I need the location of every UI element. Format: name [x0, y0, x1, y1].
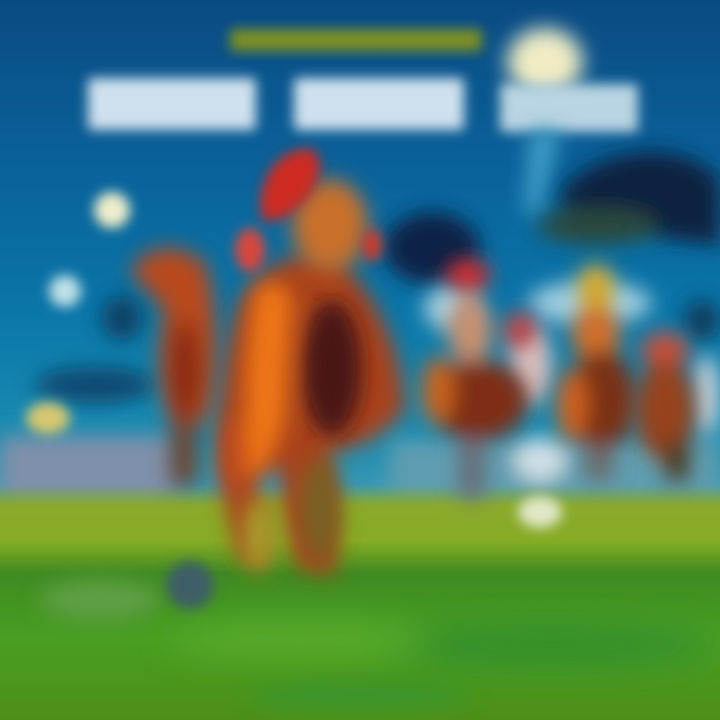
- grass track: [0, 484, 720, 720]
- jockey red cap and silks: [235, 148, 382, 272]
- light beam: [524, 130, 560, 215]
- pale crowd patches: [424, 281, 720, 435]
- grandstand: [0, 436, 720, 502]
- horse: centre with jockey: [218, 148, 405, 575]
- horse: right three: [635, 332, 695, 480]
- sky background: [0, 0, 720, 520]
- horse: right two: [557, 264, 636, 480]
- horse: left: [130, 248, 216, 485]
- title band (illegible in reference): [230, 29, 482, 51]
- headline blocks (illegible in reference): [88, 78, 638, 132]
- moon: [507, 28, 583, 96]
- glowing lights: [26, 192, 130, 434]
- dark trees: [35, 152, 720, 403]
- horse: right one: [422, 259, 536, 498]
